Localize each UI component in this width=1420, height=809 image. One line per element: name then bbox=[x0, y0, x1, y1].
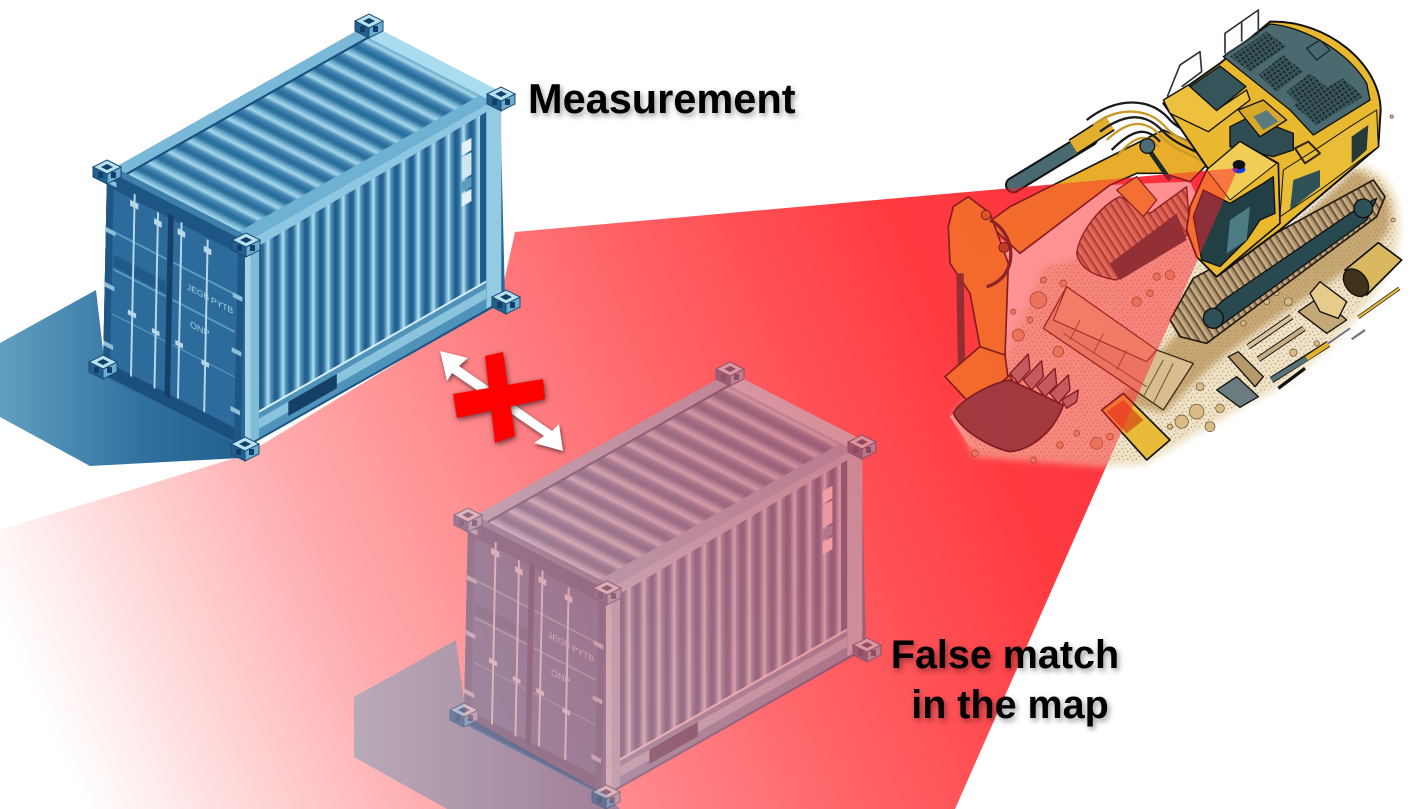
trench bbox=[1043, 287, 1193, 410]
excavator illustration bbox=[945, 10, 1402, 467]
excavator seen through the cone bbox=[944, 168, 1238, 470]
double arrow crossed out bbox=[440, 351, 563, 451]
sand block bbox=[1298, 282, 1347, 333]
yellow bin bbox=[1102, 393, 1170, 460]
rear track bbox=[1077, 177, 1190, 280]
measurement container bbox=[89, 14, 520, 461]
stick arm bbox=[948, 197, 1008, 357]
front track bbox=[1170, 180, 1385, 343]
label: False match in the map: in the map bbox=[911, 683, 1109, 727]
side panels bbox=[1280, 110, 1378, 217]
red field-of-view cone bbox=[0, 168, 1238, 809]
tools bbox=[1217, 288, 1399, 407]
label: False match in the map: False match bbox=[891, 633, 1119, 677]
shadow of false match container bbox=[354, 640, 620, 809]
mast and equipment bbox=[1230, 100, 1293, 157]
shadow of measurement container bbox=[0, 290, 245, 466]
red cross bbox=[453, 352, 545, 443]
ground and dirt bbox=[950, 115, 1400, 467]
hydraulic hoses bbox=[1087, 102, 1217, 165]
handrails bbox=[1167, 10, 1258, 97]
false match container bbox=[450, 362, 881, 809]
bucket linkage bbox=[945, 347, 1015, 417]
pipe bbox=[1338, 243, 1402, 301]
small ram bbox=[1140, 139, 1170, 180]
bucket bbox=[953, 354, 1078, 452]
bucket ram bbox=[960, 273, 962, 380]
label: False match in the map bbox=[891, 633, 1122, 732]
arm elbow bbox=[981, 210, 1011, 287]
operator cab bbox=[1187, 142, 1280, 277]
lidar sensor bbox=[1233, 160, 1245, 173]
boom cylinder bbox=[1013, 123, 1110, 185]
boom arm bbox=[992, 130, 1208, 253]
machine body bbox=[1163, 22, 1381, 277]
label: Measurement: Measurement bbox=[528, 75, 796, 122]
double arrow bbox=[440, 351, 563, 451]
engine cover with vents bbox=[1223, 24, 1370, 135]
left hood box bbox=[1163, 66, 1250, 132]
